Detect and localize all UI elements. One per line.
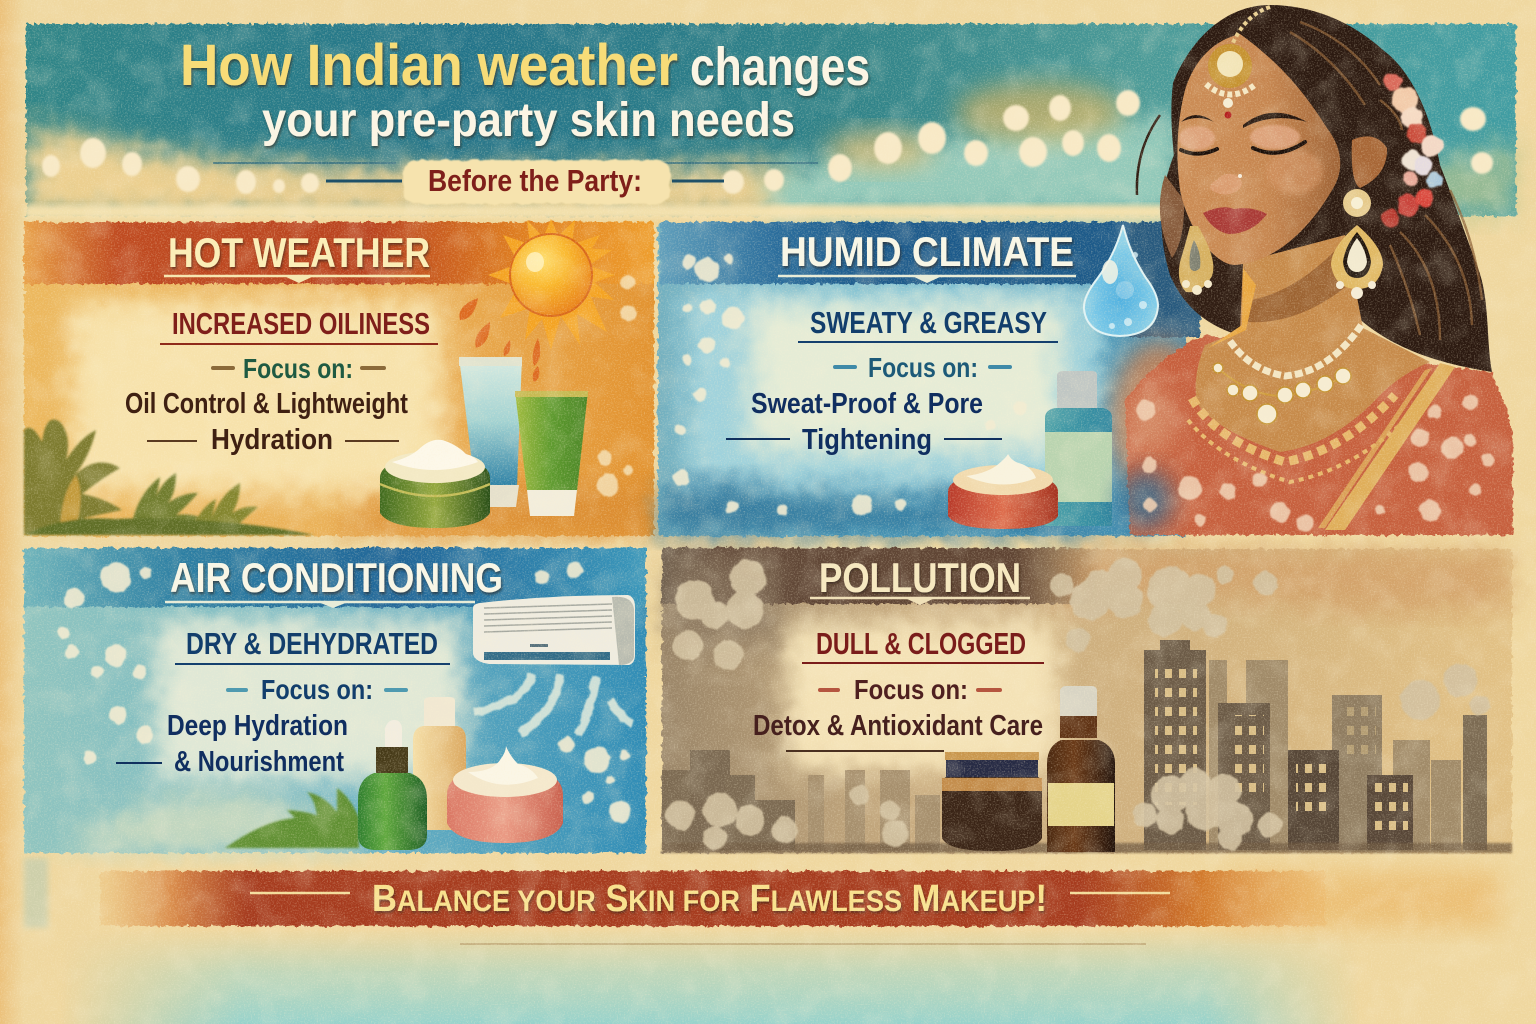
necklace <box>1213 324 1362 424</box>
text: air conditioning: Deep Hydration <box>167 710 348 742</box>
city skyline <box>662 640 1512 853</box>
text: air conditioning <box>116 554 503 778</box>
text: air conditioning: & Nourishment <box>174 746 344 778</box>
foliage: ferns <box>225 788 359 848</box>
nose <box>1210 174 1242 195</box>
text: hot weather: INCREASED OILINESS <box>172 306 430 341</box>
cream centre wash <box>785 622 1060 772</box>
title: changes <box>690 37 870 97</box>
foliage: tropical plants <box>24 420 314 535</box>
text: air conditioning: AIR CONDITIONING <box>170 554 503 601</box>
text: air conditioning: DRY & DEHYDRATED <box>186 626 438 661</box>
text: humid climate <box>726 228 1076 456</box>
panel: humid climate <box>658 222 1210 536</box>
text: humid climate: Tightening <box>802 424 932 456</box>
cream centre wash <box>155 620 465 780</box>
text: humid climate: Focus on: <box>868 352 978 383</box>
portrait: Indian woman in red sari <box>1117 5 1513 535</box>
title: your pre-party skin needs <box>262 94 795 147</box>
header banner <box>24 24 1516 219</box>
product group: jar and bottle <box>948 371 1112 529</box>
subtitle pill: before the party: Before the Party: <box>428 163 642 198</box>
icon: cold air streams <box>474 674 632 735</box>
panel: pollution <box>662 548 1512 853</box>
eyebrows <box>1181 113 1307 128</box>
sand wash lower left <box>26 125 830 218</box>
title <box>180 33 870 147</box>
smog clouds <box>665 558 1490 850</box>
icon: air conditioner <box>473 595 635 735</box>
panel: air conditioning <box>24 548 646 853</box>
text: hot weather: Hydration <box>211 424 333 456</box>
text: pollution: DULL & CLOGGED <box>816 626 1026 661</box>
product group: serum bottles and jar <box>358 697 563 850</box>
text: humid climate: SWEATY & GREASY <box>810 305 1047 340</box>
text: hot weather: Focus on: <box>243 353 353 384</box>
aqua wash lower right <box>770 115 1180 218</box>
footer text: BALANCE YOUR SKIN FOR FLAWLESS MAKEUP! <box>372 878 1047 920</box>
ear <box>1352 136 1387 188</box>
text: pollution: POLLUTION <box>819 554 1021 601</box>
lips <box>1203 207 1267 234</box>
eyeshadow <box>1179 125 1300 150</box>
panel: hot weather <box>24 219 654 536</box>
product group: dark jar and amber bottle <box>942 686 1115 852</box>
earring left <box>1179 226 1213 295</box>
text: pollution: Detox & Antioxidant Care <box>753 710 1043 742</box>
sari <box>1125 335 1513 535</box>
icon: sun <box>459 219 615 382</box>
face <box>1177 34 1340 265</box>
icon: water drop <box>1084 225 1158 336</box>
earring right <box>1331 189 1383 299</box>
subtitle pill: before the party <box>326 160 724 204</box>
sari neckline and dots <box>1192 395 1395 462</box>
title: How Indian weather <box>180 33 678 98</box>
text: hot weather: Oil Control & Lightweight <box>125 388 408 420</box>
pale blue ring <box>685 285 1105 500</box>
text: hot weather <box>125 229 438 456</box>
sari pallu border <box>1325 363 1455 530</box>
hair <box>1171 5 1492 372</box>
flowers in hair <box>1381 73 1443 227</box>
neck and chest <box>1196 235 1430 452</box>
text: pollution: Focus on: <box>854 674 968 705</box>
text: pollution <box>753 554 1044 751</box>
cream centre wash <box>70 300 445 495</box>
cream centre wash <box>750 305 1060 450</box>
closed eyes <box>1181 142 1305 154</box>
footer banner <box>100 871 1325 926</box>
hair back, lighter lower left <box>1161 150 1262 336</box>
tikka head jewel <box>1206 7 1270 118</box>
text: humid climate: Sweat-Proof & Pore <box>751 388 983 420</box>
product group: cream jar and tubes <box>380 357 588 528</box>
text: hot weather: HOT WEATHER <box>168 229 430 276</box>
text: air conditioning: Focus on: <box>261 674 373 705</box>
text: humid climate: HUMID CLIMATE <box>780 228 1074 275</box>
